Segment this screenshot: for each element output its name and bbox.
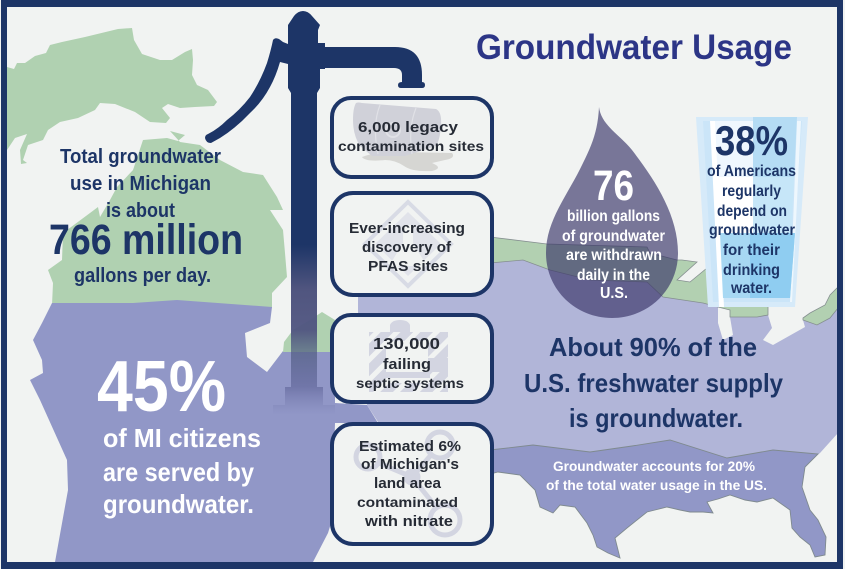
text: total groundwater use in Michigan: 766 million (49, 216, 243, 264)
text: estimated 6% of Michigan's land area: land area (374, 475, 442, 492)
text: ever-increasing discovery of PFAS sites (349, 220, 465, 275)
lower peninsula south (30, 300, 378, 562)
text: 45% of MI citizens: groundwater. (103, 489, 254, 519)
icon: spilled barrel (353, 102, 453, 171)
text: 38% of Americans: water. (730, 280, 772, 297)
icon: hazard diamond with flask (365, 202, 451, 286)
text: ever-increasing discovery of PFAS sites: Ever-increasing (349, 220, 465, 237)
text: 76 billion gallons: U.S. (600, 285, 628, 302)
text: 6,000 legacy contamination sites: 6,000 legacy (358, 119, 459, 136)
text: estimated 6% of Michigan's land area: contaminated (357, 494, 458, 510)
text: estimated 6% of Michigan's land area: with nitrate (364, 513, 453, 530)
water pump (205, 11, 425, 415)
text: 6,000 legacy contamination sites: contamination sites (338, 138, 484, 154)
text: estimated 6% of Michigan's land area (357, 438, 461, 530)
text: estimated 6% of Michigan's land area: of Michigan's (361, 456, 459, 473)
text: 76 billion gallons: daily in the (577, 267, 650, 284)
text: 38% of Americans: of Americans (707, 163, 796, 180)
northern border band (490, 237, 790, 317)
text: 45% of MI citizens: of MI citizens (103, 423, 261, 453)
text: groundwater accounts for 20%: of the total water usage in the US. (546, 477, 767, 493)
text: 38% of Americans: drinking (723, 262, 780, 279)
panel: failing septic systems (332, 315, 492, 402)
text: 38% of Americans: for their (723, 242, 780, 259)
text: total groundwater use in Michigan (49, 146, 243, 287)
text: 38% of Americans: depend on (717, 203, 787, 220)
southern states (490, 440, 826, 558)
text: 6,000 legacy contamination sites (338, 119, 484, 154)
pump handle (205, 38, 288, 143)
lower peninsula north (48, 131, 287, 308)
text: 76 billion gallons (562, 162, 665, 302)
text: total groundwater use in Michigan: is about (106, 200, 175, 222)
panel: PFAS sites (332, 193, 492, 295)
pump body (273, 11, 425, 415)
text: 38% of Americans (707, 117, 796, 297)
text: 76 billion gallons: billion gallons (567, 208, 660, 225)
upper peninsula (7, 28, 217, 164)
text: total groundwater use in Michigan: use in Michigan (70, 173, 211, 195)
text: 38% of Americans: regularly (722, 183, 781, 200)
icon: septic tank (369, 320, 448, 392)
text: 130,000 failing septic systems: 130,000 (373, 336, 440, 353)
text: ever-increasing discovery of PFAS sites: PFAS sites (368, 258, 448, 275)
text: 130,000 failing septic systems (356, 336, 464, 391)
thumb (283, 312, 335, 352)
text: about 90% of the U.S. freshwater supply: About 90% of the (549, 332, 757, 362)
text: 76 billion gallons: are withdrawn (566, 247, 662, 264)
text: groundwater accounts for 20%: Groundwater accounts for 20% (553, 458, 756, 474)
icon: nitrate molecule (356, 432, 460, 535)
text: 130,000 failing septic systems: septic systems (356, 375, 464, 391)
map: Michigan (7, 28, 378, 562)
text: total groundwater use in Michigan: gallons per day. (74, 265, 211, 287)
northern states (358, 260, 838, 463)
panel: legacy contamination (332, 98, 492, 177)
text: 38% of Americans: groundwater (709, 222, 795, 239)
text: about 90% of the U.S. freshwater supply: is groundwater. (569, 403, 743, 433)
text: groundwater accounts for 20% (546, 458, 767, 493)
text: 130,000 failing septic systems: failing (383, 356, 431, 373)
title: Groundwater Usage (476, 28, 792, 67)
text: 45% of MI citizens (97, 347, 261, 519)
text: 45% of MI citizens: are served by (103, 457, 254, 487)
text: about 90% of the U.S. freshwater supply (524, 332, 783, 433)
water level (720, 233, 795, 298)
panel: nitrate contamination (332, 424, 492, 544)
glass of water (696, 117, 808, 307)
north-eastern band (803, 287, 838, 325)
text: about 90% of the U.S. freshwater supply: U.S. freshwater supply (524, 368, 783, 398)
text: 76 billion gallons: of groundwater (562, 228, 665, 245)
text: 45% of MI citizens: 45% (97, 347, 226, 427)
map: United States (358, 237, 838, 558)
text: total groundwater use in Michigan: Total groundwater (60, 146, 221, 168)
text: 76 billion gallons: 76 (593, 162, 634, 210)
water drop (546, 107, 678, 318)
text: estimated 6% of Michigan's land area: Estimated 6% (359, 438, 461, 455)
text: ever-increasing discovery of PFAS sites: discovery of (362, 239, 452, 256)
text: 38% of Americans: 38% (715, 117, 788, 164)
